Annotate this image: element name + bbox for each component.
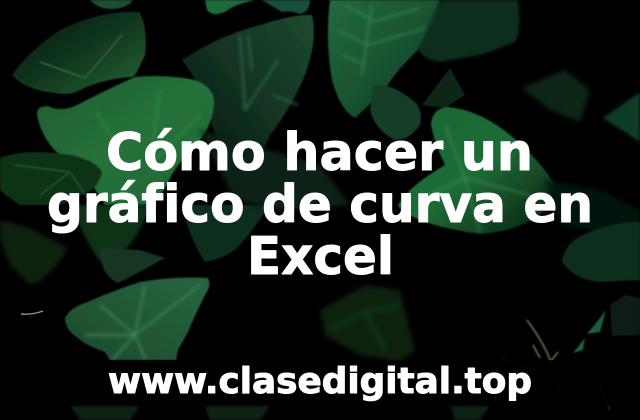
title: Cómo hacer un bbox=[106, 123, 533, 183]
title: gráfico de curva en bbox=[47, 175, 593, 235]
title bbox=[47, 123, 593, 287]
leaf: lower centre dark bbox=[320, 285, 415, 362]
leaf: lower left bbox=[0, 152, 102, 205]
leaf: dark top right bbox=[418, 0, 519, 62]
leaf: right of title dark bbox=[545, 180, 640, 240]
leaf: top small left bbox=[90, 0, 133, 9]
leaf: upper centre dark bbox=[182, 15, 314, 178]
leaf: bright right centre bbox=[398, 107, 555, 234]
leaf: central dark bbox=[200, 130, 350, 210]
leaf: right very dark bbox=[522, 70, 590, 122]
leaf: lower right bbox=[562, 222, 640, 282]
title: Excel bbox=[247, 227, 394, 287]
website url: www.clasedigital.top bbox=[108, 361, 532, 402]
leaf: right edge dark bbox=[603, 92, 640, 142]
plant stems: lower right bbox=[527, 320, 558, 362]
leaf: bright centre left bbox=[37, 76, 214, 205]
leaf: under title centre bbox=[70, 205, 150, 262]
leaf: top right of centre bbox=[328, 0, 440, 118]
leaf: upper left bbox=[12, 12, 146, 94]
leaf: centre dark behind title bbox=[182, 205, 270, 262]
leaf: top small right bbox=[262, 0, 310, 14]
leaf: far left lower bbox=[0, 220, 68, 285]
footer band bbox=[0, 360, 640, 406]
bottom leaf remnants bbox=[70, 406, 490, 420]
leaf: top small centre bbox=[205, 0, 256, 14]
leaf: dark pointed behind bbox=[422, 68, 465, 108]
plant stems: dark lower right bbox=[502, 360, 610, 410]
leaf: dark mid bbox=[100, 248, 165, 283]
leaf: dark mid right stripes bbox=[370, 85, 421, 140]
leaf: small right bright bbox=[573, 310, 606, 353]
leaf: bottom left bright bbox=[65, 278, 209, 360]
leaf: right small dark bbox=[610, 295, 640, 336]
highlight: small curve left bbox=[21, 311, 43, 314]
